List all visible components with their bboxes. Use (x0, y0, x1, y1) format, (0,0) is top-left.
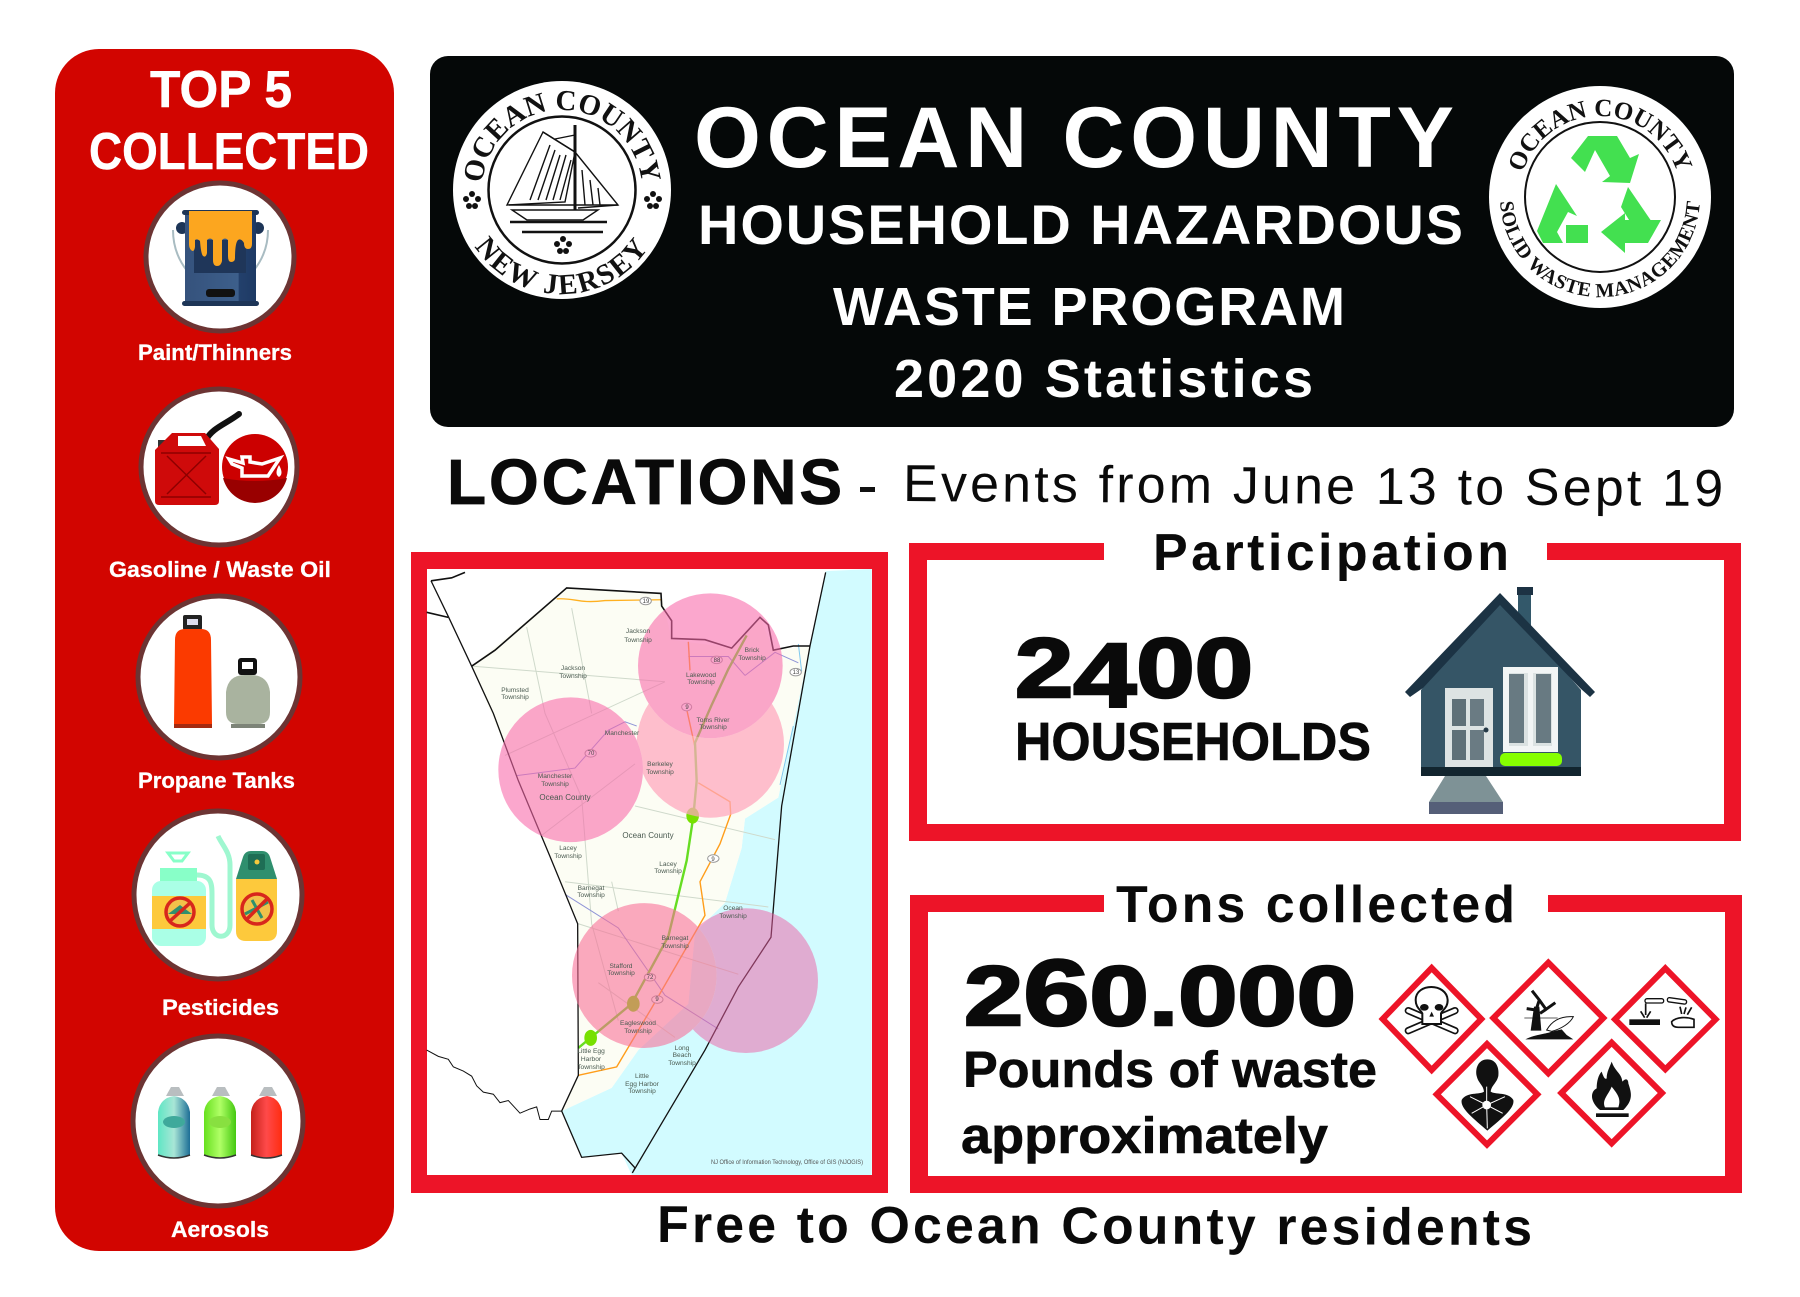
stat: 2400: 00 (1136, 621, 1253, 715)
map labels: Harbor (581, 1056, 602, 1063)
map labels: Ocean County (622, 831, 674, 840)
map labels: Jackson (626, 628, 650, 635)
map labels: Township (668, 1060, 696, 1067)
map labels: Plumsted (501, 687, 529, 694)
map labels: Ocean County (539, 793, 591, 802)
map labels: 9 (655, 997, 659, 1003)
map labels: 13 (793, 670, 800, 676)
icon: house (1405, 587, 1595, 814)
icon: flammable (1561, 1043, 1662, 1143)
map labels: Lakewood (686, 672, 716, 679)
map labels: Berkeley (647, 761, 674, 768)
map labels: Barnegat (662, 935, 689, 942)
heading: tons collected: Tons collected (1116, 876, 1515, 934)
stat label: households: HOUSEHOLDS (1015, 712, 1371, 772)
stat: 2400: 4 (1073, 626, 1137, 727)
label: pesticides: Pesticides (162, 995, 279, 1020)
icon: propane tanks (138, 596, 300, 758)
map labels: Little (635, 1073, 649, 1080)
icon: toxic skull (1383, 968, 1481, 1070)
map labels: 70 (588, 751, 595, 757)
map labels: Eagleswood (620, 1020, 656, 1027)
map labels (501, 599, 863, 1166)
heading: top 5 collected (89, 61, 369, 181)
label: gasoline / waste oil: Gasoline / Waste Oil (109, 557, 331, 582)
map labels: Long (675, 1045, 690, 1052)
stat label: pounds of waste: Pounds of waste (963, 1041, 1377, 1098)
map labels: Township (559, 673, 587, 680)
icon group: hazard diamonds (1383, 963, 1716, 1145)
map labels: Beach (673, 1052, 692, 1059)
map labels: Stafford (610, 963, 633, 970)
icon: gasoline can and oil (141, 389, 297, 545)
label: aerosols: Aerosols (171, 1217, 269, 1242)
map labels: Township (607, 970, 635, 977)
footer text: Free to Ocean County residents (657, 1196, 1532, 1257)
icon: corrosive (1615, 968, 1716, 1069)
map labels: Township (624, 637, 652, 644)
map labels: Toms River (697, 717, 730, 724)
title: household hazardous: HOUSEHOLD HAZARDOUS (698, 193, 1463, 256)
panel: participation (909, 524, 1741, 841)
map labels: Township (501, 694, 529, 701)
map labels: Township (577, 1064, 605, 1071)
logo: solid waste management seal: OCEAN COUNTY (1510, 100, 1692, 170)
title: ocean county: OCEAN COUNTY (694, 90, 1454, 186)
map labels: Manchester (605, 730, 640, 737)
logo: ocean county seal: OCEAN COUNTY (464, 90, 661, 180)
map labels: Township (654, 868, 682, 875)
map labels: Manchester (538, 773, 573, 780)
title: waste program: WASTE PROGRAM (833, 277, 1345, 337)
map labels: 9 (711, 857, 715, 863)
map labels: Township (577, 892, 605, 899)
label: paint/thinners: Paint/Thinners (138, 340, 292, 365)
heading: participation: Participation (1153, 524, 1509, 582)
logo: ocean county seal (453, 81, 671, 299)
map labels: Jackson (561, 665, 585, 672)
map labels: Little Egg (577, 1048, 605, 1055)
logo: solid waste management seal (1489, 86, 1711, 308)
map labels: 9 (685, 705, 689, 711)
map labels: Township (554, 853, 582, 860)
map labels: Township (687, 679, 715, 686)
map labels: Township (699, 724, 727, 731)
map labels: Egg Harbor (625, 1081, 660, 1088)
label: propane tanks: Propane Tanks (138, 768, 295, 793)
icon: health hazard (1437, 1044, 1537, 1145)
panel: top 5 collected (55, 49, 394, 1251)
map labels: Township (738, 655, 766, 662)
map labels: Lacey (559, 845, 577, 852)
icon: aerosols (133, 1036, 303, 1206)
map labels: Ocean (723, 905, 743, 912)
heading: locations (447, 446, 1723, 518)
map labels: Brick (745, 647, 760, 654)
map labels: Lacey (659, 861, 677, 868)
map labels: Barnegat (578, 885, 605, 892)
heading: locations: LOCATIONS (447, 446, 842, 518)
map labels: Township (628, 1088, 656, 1095)
header banner (430, 56, 1734, 427)
panel: map (411, 552, 888, 1193)
map labels: Township (661, 943, 689, 950)
map labels: Township (541, 781, 569, 788)
map labels: Township (624, 1028, 652, 1035)
map labels: Township (719, 913, 747, 920)
stat: 260.000: 260.000 (964, 940, 1356, 1045)
logo: solid waste management seal: SOLID WASTE MANAGEMENT (1500, 200, 1700, 298)
stat: 2400: 2 (1015, 621, 1062, 715)
map labels: NJ Office of Information Technology, Office of GIS (NJOGIS) (711, 1159, 863, 1166)
map labels: Township (646, 769, 674, 776)
icon: pesticides (134, 811, 302, 979)
stat label: approximately: approximately (961, 1107, 1329, 1164)
icon: environmental hazard (1493, 963, 1603, 1073)
text: event dates: Events from June 13 to Sept 19 (903, 455, 1723, 518)
heading: top 5 collected: COLLECTED (89, 123, 369, 181)
heading: top 5 collected: TOP 5 (150, 61, 292, 119)
panel: tons collected (910, 876, 1742, 1193)
map: ocean county with event circles (427, 569, 872, 1175)
title: 2020 statistics: 2020 Statistics (894, 349, 1313, 409)
map labels: 19 (643, 599, 650, 605)
map labels: 72 (647, 975, 654, 981)
icon: paint can (146, 183, 294, 331)
logo: ocean county seal: NEW JERSEY (474, 235, 646, 294)
map labels: 88 (714, 658, 721, 664)
